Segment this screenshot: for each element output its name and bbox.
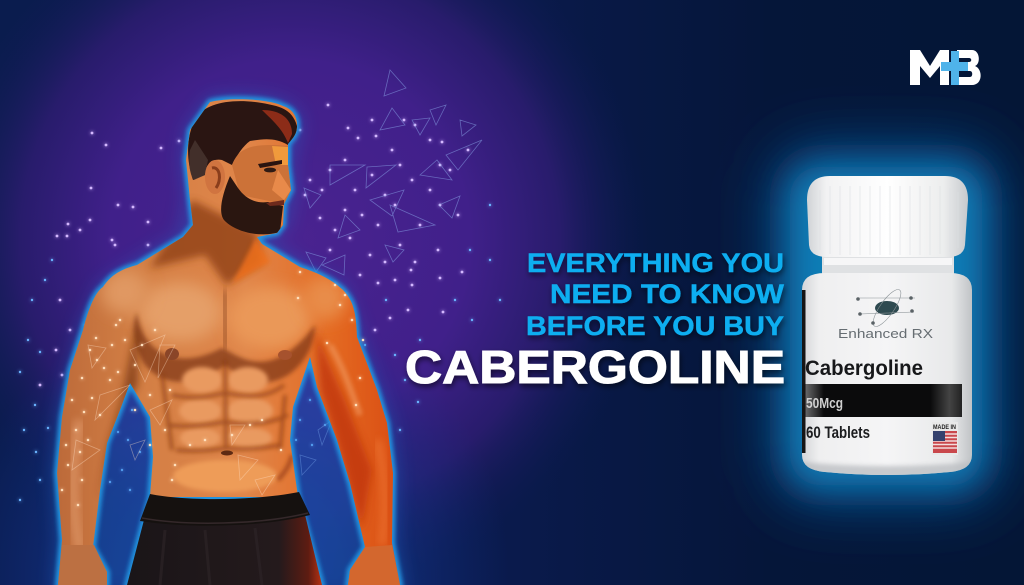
- headline: [405, 248, 785, 393]
- waistband: [140, 492, 310, 526]
- line: need to know: NEED TO KNOW: [550, 279, 784, 309]
- shoulders and chest highlights: [138, 282, 222, 342]
- triangle wireframes: [300, 70, 482, 475]
- enhanced rx logo: Enhanced RX: [838, 326, 933, 341]
- product bottle: [802, 176, 972, 480]
- eye and brow: [258, 160, 282, 168]
- logo: M+B: [910, 50, 981, 85]
- bottle cap: [807, 176, 968, 257]
- product name: Cabergoline: [805, 356, 923, 380]
- ear: [205, 160, 225, 194]
- tablet count: 60 Tablets: [806, 424, 870, 442]
- made in usa flag: [932, 422, 958, 455]
- bottle neck: [822, 252, 954, 276]
- outer blue haze: [57, 99, 400, 585]
- man figure: [57, 99, 400, 585]
- muscle shading: [73, 101, 385, 550]
- blue glow outline: [57, 99, 400, 585]
- line: before you buy: BEFORE YOU BUY: [526, 311, 784, 341]
- blue particles: [20, 205, 500, 500]
- glowing particles and wireframes over the body: [62, 272, 363, 505]
- letter B: [957, 50, 981, 85]
- black dose strip: 50Mcg: [806, 396, 843, 412]
- bottle halo: [770, 145, 1002, 505]
- plus sign: [941, 51, 968, 85]
- beard: [221, 176, 283, 234]
- particle field behind figure: [20, 70, 500, 500]
- line: everything you: EVERYTHING YOU: [527, 248, 784, 278]
- nipples: [165, 348, 179, 360]
- made in usa flag: MADE IN: [933, 424, 956, 431]
- letter M: [910, 50, 949, 85]
- arm shadows: [98, 320, 138, 500]
- shorts body: [127, 494, 322, 585]
- shorts: [127, 492, 322, 585]
- black dose strip: [805, 384, 962, 417]
- purple star particles: [40, 105, 468, 385]
- hair: [188, 101, 297, 180]
- face: [232, 145, 291, 204]
- abdominal muscles: [173, 367, 277, 492]
- neck and collar shadow: [150, 200, 262, 285]
- body silhouette: [57, 99, 400, 585]
- bottle body: [802, 273, 972, 480]
- enhanced rx logo: [838, 286, 933, 341]
- hands: [58, 545, 400, 585]
- line: cabergoline: CABERGOLINE: [405, 341, 785, 393]
- hip crease: [278, 455, 292, 480]
- pectoral shadows: [134, 312, 315, 382]
